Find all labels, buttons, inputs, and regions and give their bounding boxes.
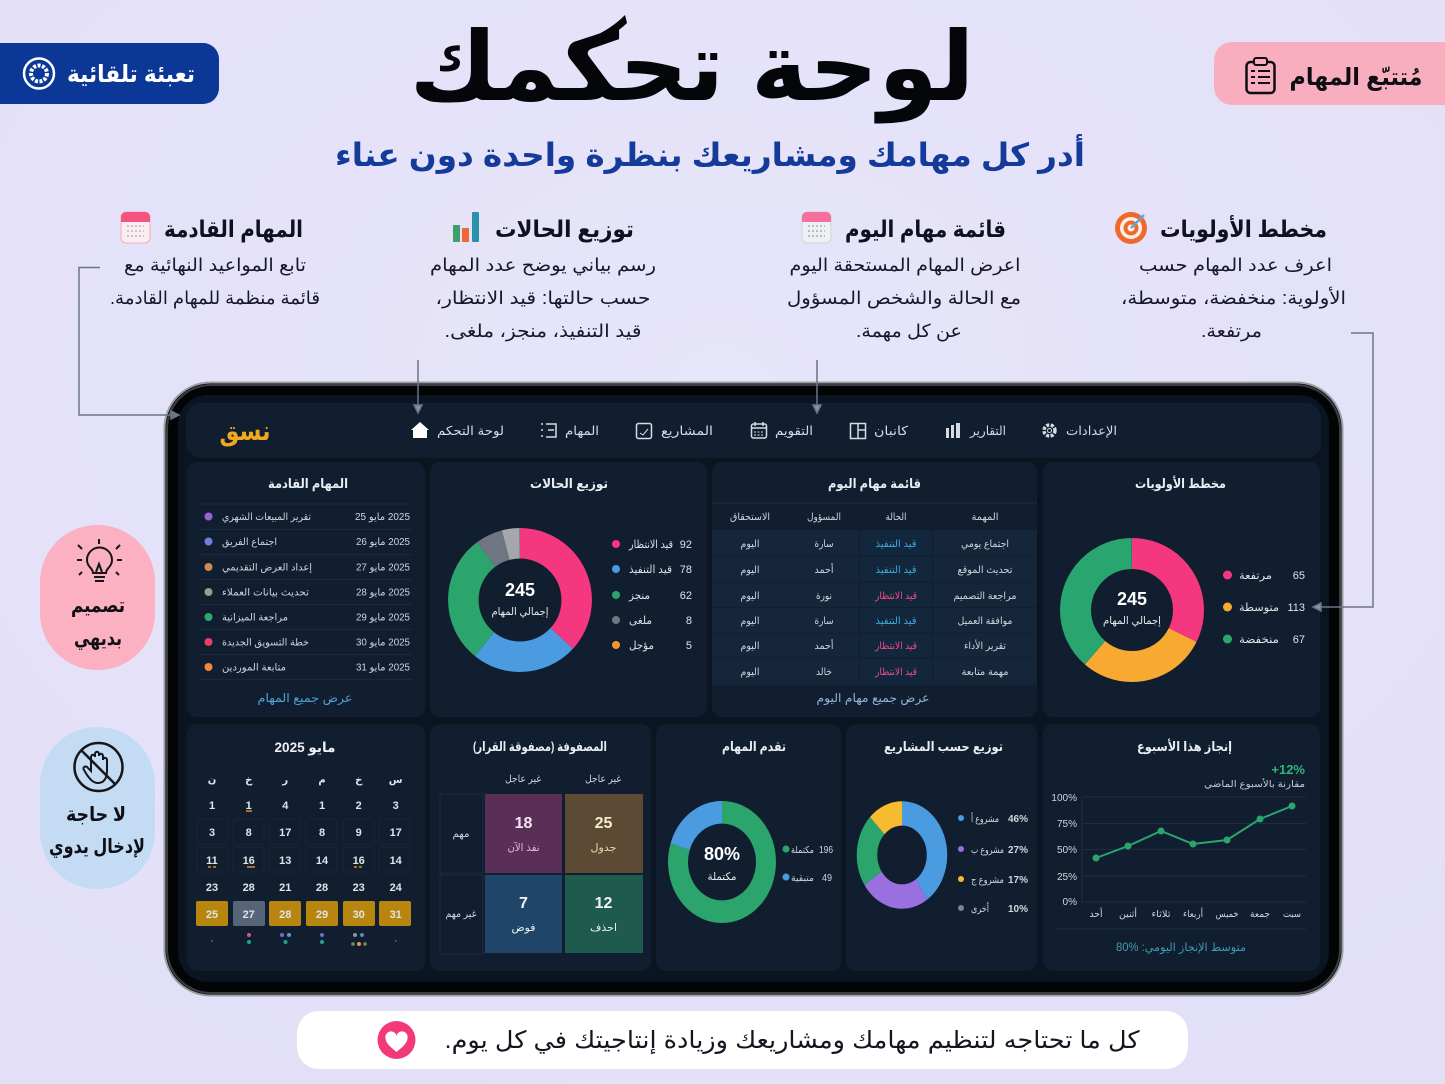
badge: auto fill [0,43,219,104]
calendar grid: 27 [243,909,255,921]
panel: weekly completion: إنجاز هذا الأسبوع [1137,738,1232,754]
pill: intuitive design: تصميم [71,595,125,617]
nav: calendar [751,422,813,439]
calendar grid: 28 [316,882,328,894]
calendar grid: 23 [206,882,218,894]
panel: task progress: تقدم المهام [722,739,786,755]
calendar grid: 25 [206,909,218,921]
pill: intuitive design: بديهي [74,628,122,651]
matrix cell: delete: 12 [595,895,612,912]
line chart: 100% [1051,793,1077,804]
footer banner [297,1011,1188,1069]
feature: status distribution: حسب حالتها: قيد الانتظار، [436,288,650,309]
feature: upcoming tasks: قائمة منظمة للمهام القادمة. [110,288,320,309]
panel: upcoming tasks: عرض جميع المهام [258,691,352,706]
calendar grid: 14 [390,855,403,867]
table: اليوم [740,616,760,627]
matrix cell: delegate: فوض [512,922,536,934]
legend: status: مؤجل [629,640,654,652]
legend: priorities: متوسطة [1239,602,1279,614]
legend: progress: متبقية [791,873,814,884]
tablet device [164,382,1342,996]
table: قيد التنفيذ [876,616,917,627]
calendar grid: 28 [243,882,255,894]
calendar grid: 1 [319,800,325,812]
nav: reports [946,423,1006,439]
calendar grid: 23 [353,882,365,894]
feature: today's tasks: اعرض المهام المستحقة اليوم [790,255,1020,276]
calendar grid: خ [245,775,253,786]
line chart: سبت [1283,909,1301,920]
matrix cell: schedule: جدول [590,842,616,854]
calendar grid: 17 [390,827,402,839]
task list: 2025 مايو 26 [356,537,410,548]
table: قيد التنفيذ [876,565,917,576]
legend: progress: مكتملة [791,845,814,856]
task list: مراجعة الميزانية [222,612,288,624]
donut: status [463,543,577,657]
nav: tasks [541,424,599,439]
legend: status: 5 [686,640,692,652]
matrix cell: schedule [565,794,643,873]
table: موافقة العميل [958,616,1012,627]
matrix cell: do now: 18 [515,815,532,832]
subtitle: أدر كل مهامك ومشاريعك بنظرة واحدة دون عناء [335,134,1085,174]
task list: إعداد العرض التقديمي [222,562,312,574]
feature: priorities: الأولوية: منخفضة، متوسطة، [1121,287,1346,309]
matrix cell: delegate: 7 [519,895,528,912]
task list [204,512,410,674]
legend: status: 92 [680,539,692,551]
nav: kanban [850,424,908,438]
title: لوحة تحكمك [410,14,974,124]
feature: status distribution: رسم بياني يوضح عدد المهام [430,255,656,276]
panel: upcoming tasks: المهام القادمة [268,476,348,492]
table: تحديث الموقع [958,565,1013,576]
panel: weekly completion: متوسط الإنجاز اليومي: ‎80% [1116,942,1246,955]
badge: task tracker [1214,42,1445,105]
panel: status distribution [430,462,707,717]
table: اليوم [740,641,760,652]
panel: priorities: مخطط الأولويات [1135,475,1226,491]
calendar grid: 9 [356,827,362,839]
task list: تقرير المبيعات الشهري [222,512,311,523]
donut: projects [867,813,937,897]
badge: task tracker: مُتتبّع المهام [1290,64,1422,91]
task list: 2025 مايو 30 [356,638,410,648]
arrow: priorities connector [1313,333,1373,611]
calendar grid: 8 [319,827,325,839]
panel: today's tasks [712,462,1037,717]
line chart: أحد [1090,907,1103,920]
feature: upcoming tasks: المهام القادمة [164,216,303,243]
legend: progress: 49 [822,873,832,884]
nav: settings: الإعدادات [1066,424,1117,438]
table: اجتماع يومي [961,539,1009,550]
icon: calendar pink [121,212,150,243]
legend: projects: مشروع ب [971,845,1004,856]
nav: calendar: التقويم [775,424,813,439]
calendar grid: 3 [393,800,399,812]
calendar grid: 28 [279,909,291,921]
calendar grid: 17 [279,827,291,839]
nav: kanban: كانبان [874,424,908,438]
feature: today's tasks: قائمة مهام اليوم [845,216,1006,243]
nav: reports: التقارير [969,424,1006,439]
feature: today's tasks [787,212,1021,342]
calendar grid: ن [208,775,216,786]
line chart: خميس [1216,909,1239,920]
donut: progress: 80% [704,844,740,864]
nav: dashboard: لوحة التحكم [437,424,504,439]
pill: no manual entry: لإدخال يدوي [49,836,145,859]
calendar grid: 30 [353,909,365,921]
line chart: جمعة [1250,909,1270,920]
footer banner: كل ما تحتاجه لتنظيم مهامك ومشاريعك وزيادة إنتاجيتك في كل يوم. [444,1027,1140,1055]
table: اليوم [740,667,760,678]
task list: اجتماع الفريق [222,537,277,548]
panel: today's tasks: قائمة مهام اليوم [828,476,921,492]
donut: priorities [1076,554,1188,666]
nav bar [186,403,1321,458]
task list: تحديث بيانات العملاء [222,588,309,598]
table [712,503,1037,685]
nav: projects [636,424,713,439]
panel: decision matrix [430,724,651,971]
legend: priorities: مرتفعة [1239,570,1272,582]
table: نورة [816,591,832,602]
task list: 2025 مايو 28 [356,588,410,598]
legend: priorities [1223,570,1305,646]
logo: نسق [220,416,270,447]
feature: priorities: اعرف عدد المهام حسب [1139,255,1332,276]
donut: status: إجمالي المهام [492,606,549,618]
table: أحمد [814,563,834,576]
donut: priorities: إجمالي المهام [1103,615,1161,627]
table: مراجعة التصميم [954,591,1016,602]
table: الحالة [886,512,906,523]
feature: priorities: مرتفعة. [1201,321,1262,342]
calendar grid: 3 [209,827,215,839]
calendar grid: 8 [246,827,252,839]
legend: status: منجز [628,590,650,602]
panel: decision matrix: غير عاجل [505,774,541,785]
feature: upcoming tasks: تابع المواعيد النهائية مع [124,255,306,276]
pill: intuitive design [40,525,155,670]
nav: dashboard [411,422,504,439]
panel: decision matrix: غير عاجل [585,774,621,785]
table: أحمد [814,639,834,652]
legend: status: 78 [680,564,692,576]
table: قيد التنفيذ [876,539,917,550]
panel: task progress [656,724,841,971]
legend: status: قيد الانتظار [628,539,673,551]
matrix cell: schedule: 25 [595,815,612,832]
calendar grid: 14 [316,855,329,867]
matrix cell: do now [485,794,562,873]
legend: projects: 46% [1008,814,1028,825]
icon: target [1115,212,1147,244]
donut: priorities: 245 [1117,589,1147,609]
nav: settings [1044,424,1117,438]
calendar grid: 24 [390,882,403,894]
donut: status: 245 [505,580,535,600]
task list: متابعة الموردين [222,662,286,674]
panel: calendar: مايو 2025 [274,739,336,756]
task list: 2025 مايو 29 [356,612,410,624]
panel: decision matrix: غير مهم [446,909,476,920]
panel: decision matrix: المصفوفة (مصفوقة القرار) [473,739,607,754]
feature: today's tasks: مع الحالة والشخص المسؤول [787,288,1021,309]
pill: no manual entry: لا حاجة [66,804,126,826]
matrix cell: delete [565,875,643,953]
legend: status: ملغى [629,615,652,627]
calendar grid: 31 [390,909,402,921]
stat: weekly change [1204,762,1305,790]
table: اليوم [740,591,760,602]
feature: priorities [1115,212,1346,342]
calendar grid: 1 [246,800,252,812]
icon: light bulb [77,539,122,581]
task list: 2025 مايو 31 [356,662,410,674]
calendar grid: 29 [316,909,328,921]
stat: weekly change: +12% [1271,762,1305,777]
line chart: 50% [1057,845,1077,856]
panel: project distribution [846,724,1037,971]
legend: priorities: 113 [1287,602,1305,614]
calendar grid: 13 [279,855,291,867]
feature: status distribution [430,212,656,342]
arrow: status connector [414,360,422,413]
line chart: 25% [1057,872,1077,883]
feature: priorities: مخطط الأولويات [1160,214,1327,243]
table: سارة [814,539,834,550]
calendar grid: 4 [282,800,289,812]
table: قيد الانتظار [874,591,917,602]
calendar grid: خ [355,775,363,786]
matrix cell: delegate [485,875,562,953]
calendar grid: س [389,775,403,786]
table: الاستحقاق [730,512,770,523]
matrix cell: delete: احذف [590,922,617,934]
legend: projects: 27% [1008,845,1028,856]
legend: priorities: 67 [1293,634,1305,646]
arrow: today tasks connector [813,360,821,413]
calendar grid: 16 [243,855,255,867]
table: تقرير الأداء [964,639,1006,652]
legend: progress: 196 [819,845,833,856]
nav: tasks: المهام [565,424,599,439]
panel: decision matrix: مهم [452,829,470,840]
panel: status distribution: توزيع الحالات [530,476,608,491]
calendar grid: 16 [353,855,365,867]
calendar grid: م [318,775,326,786]
legend: progress [782,845,833,884]
table: قيد الانتظار [874,641,917,652]
legend: status: 62 [680,590,692,602]
line chart: أثنين [1119,907,1137,920]
line chart: أربعاء [1183,907,1203,920]
feature: today's tasks: عن كل مهمة. [856,321,962,342]
arrow: upcoming tasks connector [79,268,179,419]
line chart: 0% [1063,897,1077,908]
legend: projects: مشروع ج [971,875,1004,886]
table: سارة [814,616,834,627]
donut: progress: مكتملة [708,871,736,883]
icon: heart [378,1021,416,1059]
legend: projects: مشروع أ [971,812,999,825]
table: اليوم [740,565,760,576]
legend: projects: أخرى [971,902,989,915]
table: خالد [816,667,832,678]
stat: weekly change: مقارنة بالأسبوع الماضي [1204,778,1305,790]
calendar grid: ر [281,775,288,786]
legend: projects: 17% [1008,875,1028,886]
line chart: 75% [1057,819,1077,830]
icon: no hand [74,743,122,791]
donut: progress [678,812,766,912]
legend: status: قيد التنفيذ [629,564,672,576]
nav: projects: المشاريع [661,424,713,439]
feature: upcoming tasks [110,212,320,309]
panel: today's tasks: عرض جميع مهام اليوم [816,691,930,706]
table: المسؤول [807,512,841,523]
legend: priorities: منخفضة [1239,634,1279,646]
panel: calendar [187,724,425,971]
table: مهمة متابعة [962,667,1008,678]
calendar grid: 1 [209,800,215,812]
calendar grid: 11 [206,855,218,867]
icon: calendar grey [802,212,831,243]
legend: priorities: 65 [1293,570,1305,582]
legend: status: 8 [686,615,692,627]
pill: no manual entry [40,727,155,889]
legend: projects: 10% [1008,904,1028,915]
panel: project distribution: توزيع حسب المشاريع [884,739,1003,754]
task list: 2025 مايو 25 [355,512,410,523]
table: اليوم [740,539,760,550]
matrix cell: do now: نفذ الآن [508,841,540,854]
table: قيد الانتظار [874,667,917,678]
icon: bar chart [453,212,479,242]
calendar grid: 2 [356,800,362,812]
line chart [1051,793,1306,920]
panel: upcoming tasks [187,462,425,717]
legend: status [612,539,692,652]
feature: status distribution: قيد التنفيذ، منجز، ملغى. [444,321,642,342]
feature: status distribution: توزيع الحالات [495,216,634,243]
table: المهمة [972,512,998,523]
line chart: ثلاثاء [1152,909,1171,920]
task list: 2025 مايو 27 [356,562,410,574]
calendar grid [196,775,411,946]
panel: weekly completion [1043,724,1320,971]
legend: projects [958,812,1028,915]
task list: خطة التسويق الجديدة [222,638,309,648]
badge: auto fill: تعبئة تلقائية [67,61,195,88]
panel: priorities [1043,462,1320,717]
calendar grid: 21 [279,882,291,894]
